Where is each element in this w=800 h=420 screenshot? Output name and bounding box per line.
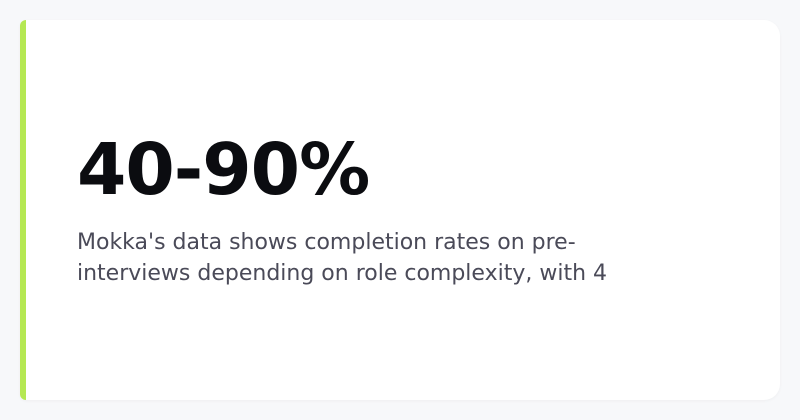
text block: description	[77, 230, 607, 286]
text block: description: Mokka's data shows completion rates on pre-	[77, 230, 576, 255]
text block: description: interviews depending on role complexity, with 4	[77, 261, 607, 286]
heading: stat value: 40-90%	[77, 128, 369, 211]
